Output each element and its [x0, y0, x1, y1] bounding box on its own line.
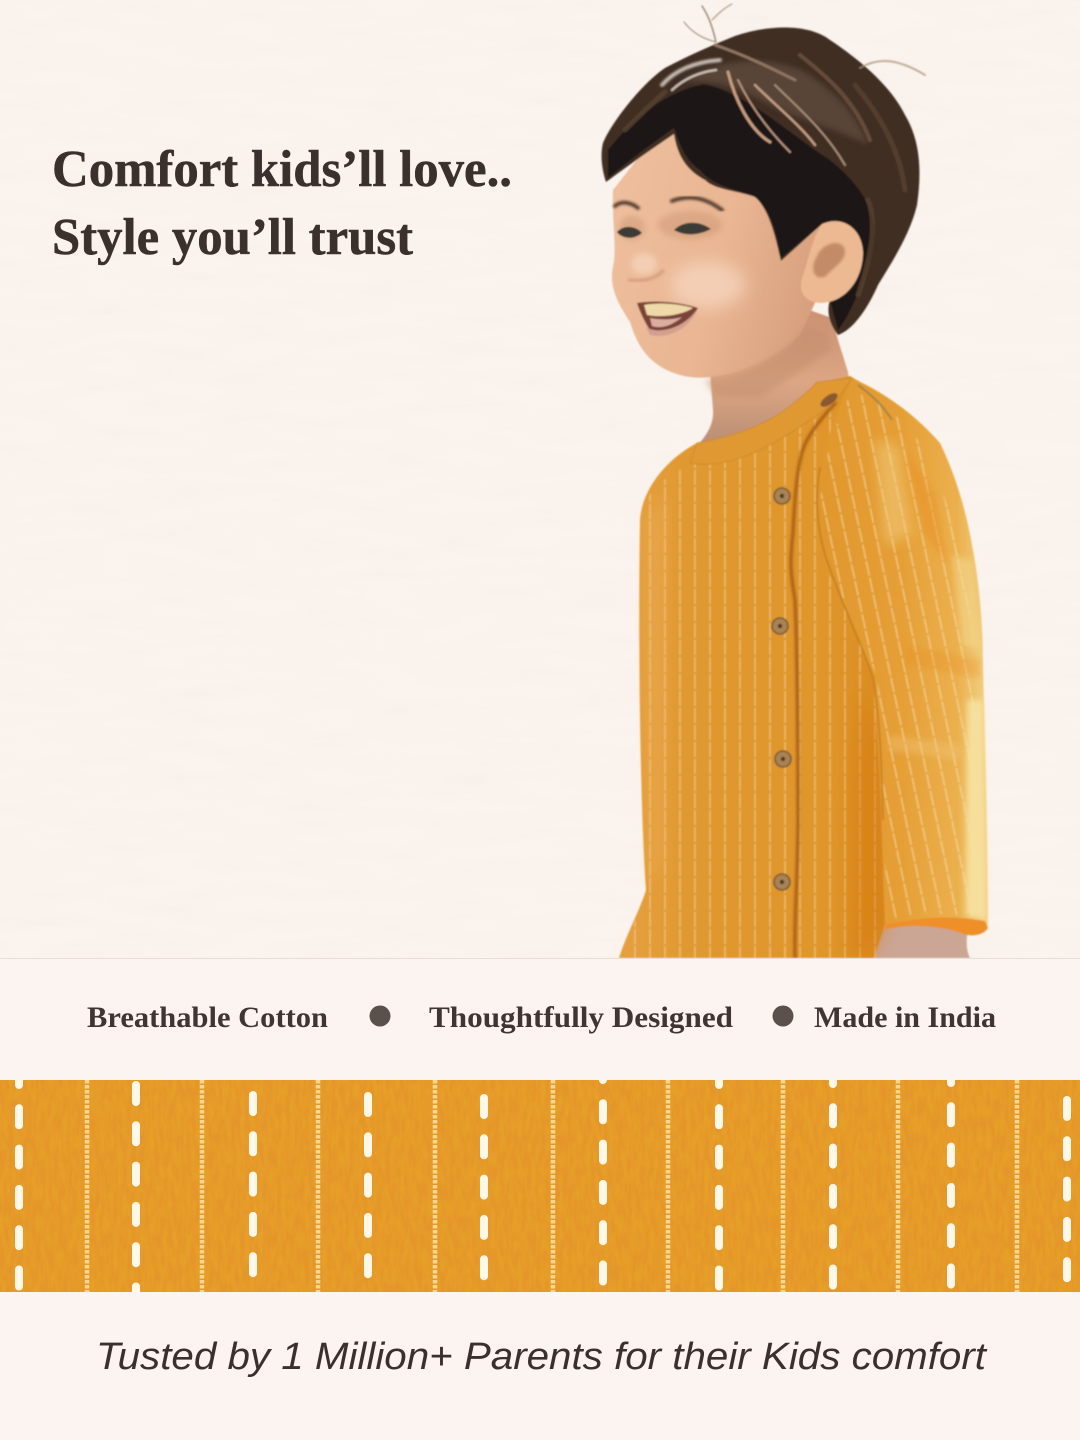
benefits row	[87, 1001, 996, 1034]
thin stitched lines	[87, 1080, 1017, 1292]
fold shading on body	[850, 690, 886, 958]
sleeve inner seam	[817, 467, 883, 820]
face	[612, 130, 835, 378]
eye socket shade	[658, 211, 722, 239]
neck	[697, 305, 850, 446]
hair	[602, 4, 925, 335]
sleeve	[817, 378, 988, 932]
title	[52, 141, 512, 266]
body stripes	[622, 398, 882, 958]
kurta body	[619, 376, 900, 958]
eyebrows	[615, 198, 722, 210]
benefit labels	[87, 1001, 996, 1034]
sleeve light and shade patches	[875, 440, 986, 920]
title: Style you’ll trust	[52, 209, 414, 266]
hair strands	[625, 4, 925, 295]
nose shading	[628, 270, 664, 281]
buttons	[772, 391, 840, 890]
hand	[874, 922, 970, 958]
hair brown mass	[602, 27, 919, 335]
ear	[801, 221, 863, 303]
bullet separators	[370, 1006, 794, 1026]
sleeve stripes	[820, 392, 980, 920]
fabric swatch strip	[0, 1063, 1080, 1292]
hair lighter crown	[680, 61, 868, 145]
benefit labels: Thoughtfully Designed	[429, 1001, 733, 1034]
child photo illustration	[602, 4, 988, 958]
smile	[637, 302, 698, 330]
collar	[690, 378, 852, 464]
trust tagline: Tusted by 1 Million+ Parents for their Kids comfort	[96, 1336, 988, 1378]
hair dark core	[608, 84, 874, 330]
title: Comfort kids’ll love..	[52, 141, 512, 198]
chin shadow	[704, 339, 828, 396]
benefit labels: Made in India	[814, 1001, 996, 1034]
dashed white stitches	[19, 1063, 1067, 1292]
benefit labels: Breathable Cotton	[87, 1001, 328, 1034]
eye left	[617, 227, 642, 238]
eye right	[674, 223, 711, 234]
shoulder seam	[858, 385, 892, 420]
sleeve cuff	[885, 918, 988, 935]
cheek highlight	[670, 261, 746, 309]
placket seam	[791, 402, 836, 958]
